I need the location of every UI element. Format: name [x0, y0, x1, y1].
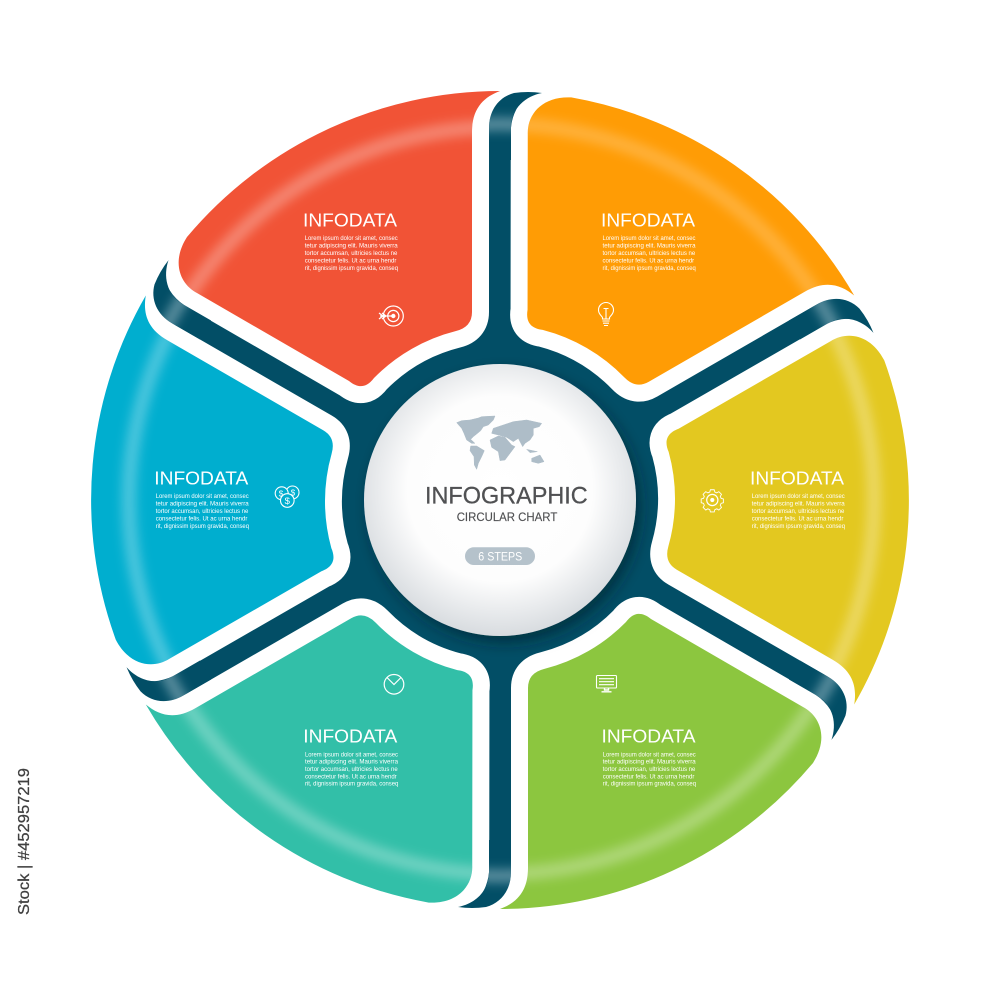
panel: teal segment [146, 615, 473, 903]
text block: orange panel: rit, dignissim ipsum gravida, conseq [602, 265, 696, 272]
text block: red panel: INFODATA [303, 210, 398, 230]
icon: coins: $ [285, 496, 291, 507]
text block: teal panel: consectetur felis. Ut ac urna hendr [305, 773, 398, 780]
text block: blue panel: tetur adipiscing elit. Mauris viverra [156, 501, 249, 508]
text block: red panel: tetur adipiscing elit. Mauris viverra [305, 242, 398, 250]
text block: red panel: Lorem ipsum dolor sit amet, consec [305, 235, 398, 242]
panel: red segment [178, 91, 500, 386]
text block: green panel: INFODATA [602, 726, 696, 747]
text block: yellow panel [750, 468, 845, 530]
text block: teal panel: Lorem ipsum dolor sit amet, consec [305, 751, 399, 758]
text block: yellow panel: tortor accumsan, ultricies lectus ne [752, 508, 845, 515]
text block: orange panel: INFODATA [601, 210, 696, 230]
text block: green panel: Lorem ipsum dolor sit amet, consec [603, 751, 696, 758]
icon: light bulb [598, 303, 614, 326]
text block: orange panel: consectetur felis. Ut ac urna hendr [602, 257, 695, 264]
text block: blue panel: consectetur felis. Ut ac urna hendr [156, 516, 248, 522]
text block: teal panel: INFODATA [303, 726, 398, 747]
badge: 6 steps [465, 547, 535, 565]
icon: monitor [596, 676, 616, 692]
text block: yellow panel: tetur adipiscing elit. Mauris viverra [752, 501, 845, 508]
icon: coins: $ [291, 488, 296, 498]
text block: red panel: tortor accumsan, ultricies lectus ne [305, 250, 398, 257]
text block: green panel: rit, dignissim ipsum gravida, conseq [603, 781, 696, 788]
icon: world map [457, 416, 544, 469]
spoke tips with sheen [18, 91, 910, 914]
icon: gear [701, 490, 723, 512]
text block: yellow panel: consectetur felis. Ut ac urna hendr [752, 516, 844, 522]
icon: target with arrow [379, 306, 403, 326]
text block: blue panel [154, 468, 249, 530]
text block: blue panel: tortor accumsan, ultricies lectus ne [156, 508, 249, 515]
icon: pie chart [384, 674, 404, 694]
panel: orange segment [527, 97, 854, 385]
title: INFOGRAPHIC [425, 482, 588, 509]
icon: coins: $ [279, 490, 284, 498]
text block: green panel [602, 726, 696, 788]
text block: orange panel [601, 210, 696, 272]
text block: teal panel: rit, dignissim ipsum gravida, conseq [305, 781, 399, 788]
text block: yellow panel: rit, dignissim ipsum gravida, conseq [752, 523, 845, 530]
dark spoke and ring structure [100, 100, 900, 900]
text block: orange panel: tetur adipiscing elit. Mauris viverra [602, 242, 696, 250]
text block: blue panel: Lorem ipsum dolor sit amet, consec [156, 493, 249, 500]
text block: green panel: tetur adipiscing elit. Mauris viverra [603, 759, 696, 766]
text block: yellow panel: Lorem ipsum dolor sit amet, consec [752, 493, 845, 500]
panel: blue segment [91, 296, 334, 664]
text block: teal panel [303, 726, 399, 788]
panel: green segment [500, 614, 822, 909]
subtitle: CIRCULAR CHART [457, 510, 558, 524]
panel: yellow segment [666, 336, 909, 704]
badge: 6 steps: 6 STEPS [478, 552, 523, 564]
text block: red panel [303, 210, 398, 272]
text block: orange panel: Lorem ipsum dolor sit amet, consec [602, 235, 696, 242]
text block: red panel: consectetur felis. Ut ac urna hendr [305, 257, 397, 264]
text block: blue panel: rit, dignissim ipsum gravida, conseq [156, 523, 249, 530]
text block: red panel: rit, dignissim ipsum gravida, conseq [305, 265, 398, 272]
text block: teal panel: tetur adipiscing elit. Mauris viverra [305, 759, 398, 766]
text block: orange panel: tortor accumsan, ultricies lectus ne [602, 250, 696, 257]
text block: blue panel: INFODATA [154, 468, 249, 488]
text block: green panel: consectetur felis. Ut ac urna hendr [603, 773, 695, 780]
stock id label: Stock | #452957219 [16, 768, 33, 915]
center circle [364, 364, 636, 636]
text block: teal panel: tortor accumsan, ultricies lectus ne [305, 766, 398, 773]
icon: coins [275, 486, 299, 507]
text block: green panel: tortor accumsan, ultricies lectus ne [603, 766, 696, 773]
text block: yellow panel: INFODATA [750, 468, 845, 488]
